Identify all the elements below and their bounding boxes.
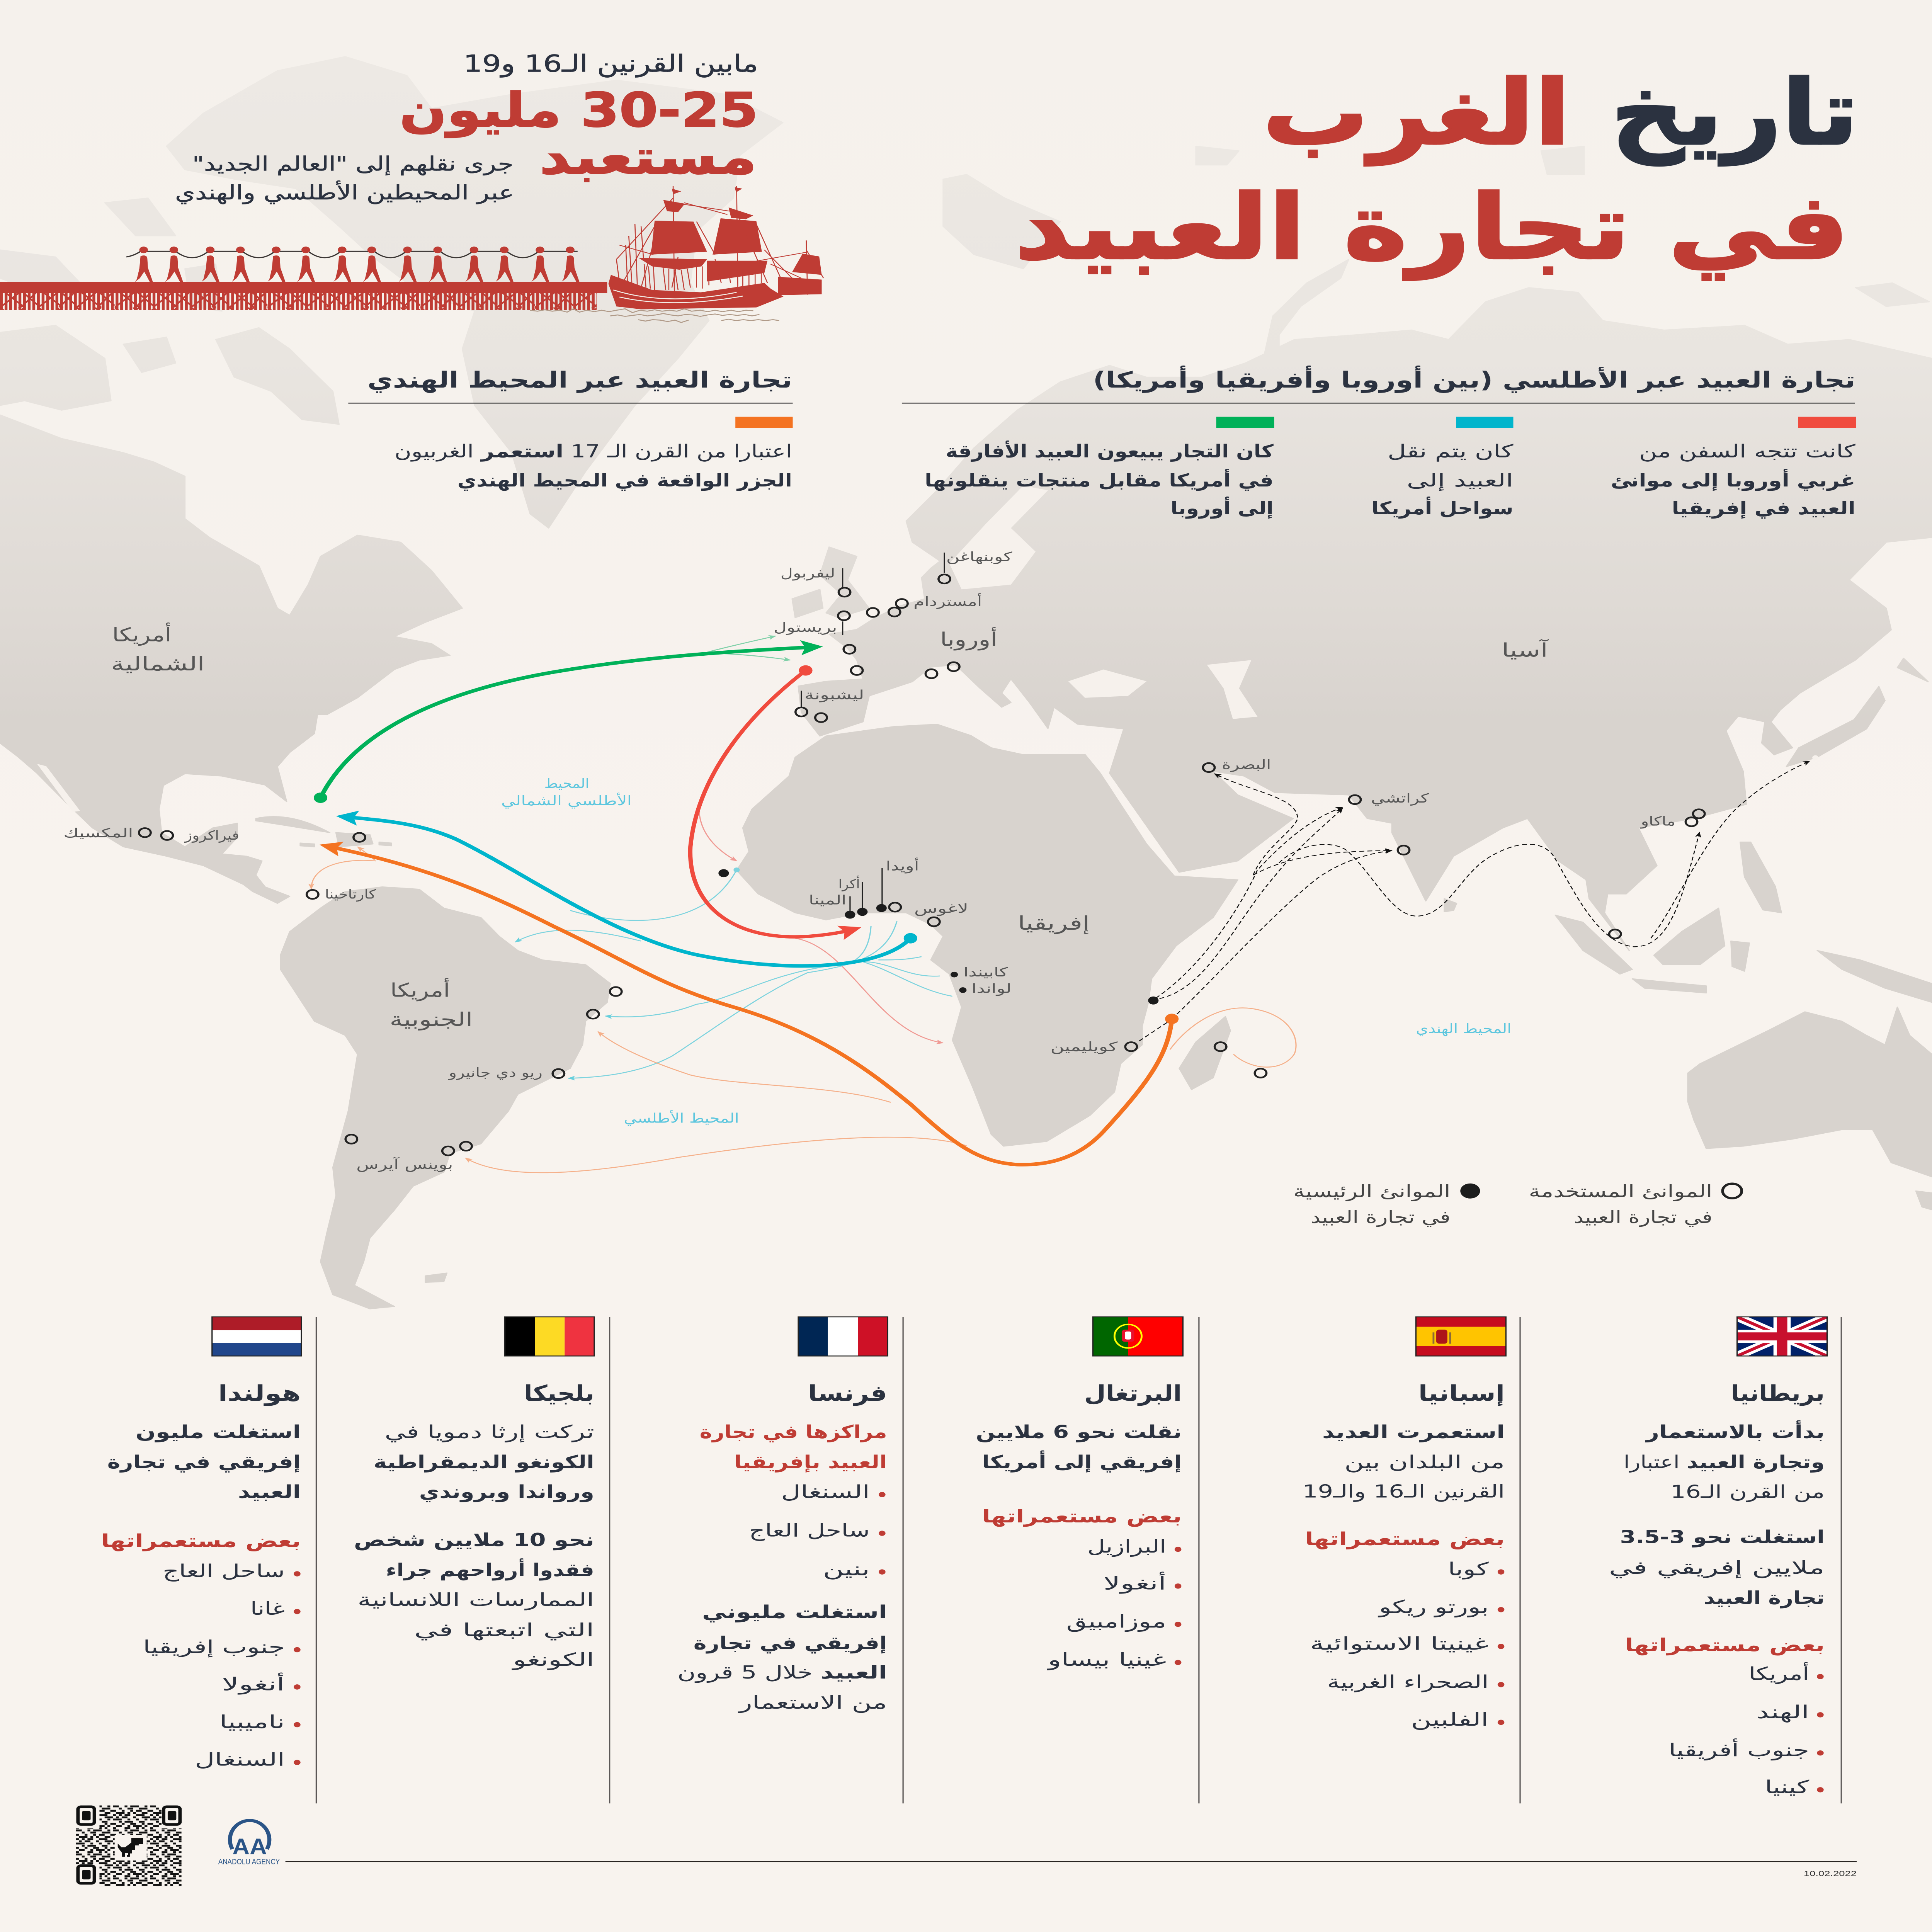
statistic block: مابين القرنين الـ16 و19 <box>464 50 758 78</box>
sea waves <box>530 309 779 323</box>
panel: Netherlands <box>101 1317 301 1770</box>
atlantic column: blue route: العبيد إلى <box>1406 470 1513 491</box>
panel: Britain: بعض مستعمراتها <box>1625 1634 1825 1656</box>
panel: Netherlands: هولندا <box>218 1381 301 1406</box>
map labels: oceans <box>501 776 1512 1126</box>
panel: France <box>677 1317 888 1713</box>
bullet list: السنغال <box>781 1481 870 1502</box>
map labels: cities: ماكاو <box>1640 814 1675 829</box>
bullet list: غينيا بيساو <box>1046 1649 1166 1670</box>
logo: Anadolu Agency: AA <box>232 1834 267 1859</box>
atlantic column: blue route <box>1372 417 1514 519</box>
map labels: cities: لاغوس <box>914 901 968 916</box>
map labels: continents: الجنوبية <box>389 1009 473 1031</box>
logo: Anadolu Agency: ANADOLU AGENCY <box>218 1857 280 1866</box>
map: Caribbean islands <box>256 816 391 847</box>
bullet list: أنغولا <box>222 1672 285 1695</box>
legend key: orange <box>735 417 793 428</box>
panel: France: العبيد خلال 5 قرون <box>677 1662 887 1683</box>
panel: Netherlands: العبيد <box>238 1481 301 1502</box>
panel: France: استغلت مليوني <box>702 1602 887 1622</box>
bullet list: الهند <box>1756 1701 1809 1723</box>
bullet list: بنين <box>823 1559 870 1580</box>
panel: Britain: ملايين إفريقي في <box>1609 1557 1825 1578</box>
logo: Anadolu Agency <box>218 1820 280 1866</box>
map labels: oceans: المحيط <box>544 776 589 791</box>
section: Indian Ocean slave trade: اعتبارا من القرن الـ 17 استعمر الغربيون <box>395 441 792 462</box>
leader lines <box>801 553 944 912</box>
map: South America <box>281 887 610 1309</box>
statistic block: جرى نقلهم إلى "العالم الجديد" <box>192 153 514 176</box>
map labels: cities: البصرة <box>1222 757 1271 772</box>
map labels: oceans: الأطلسي الشمالي <box>501 793 632 809</box>
flag: Netherlands <box>212 1317 301 1356</box>
bullet list: ناميبيا <box>219 1711 285 1732</box>
map: British Isles <box>792 547 869 617</box>
panel: Portugal: البرتغال <box>1084 1381 1182 1406</box>
section: Atlantic slave trade: تجارة العبيد عبر الأطلسي (بين أوروبا وأفريقيا وأمريكا) <box>1093 365 1855 393</box>
pier <box>0 282 607 310</box>
bullet list <box>1310 1559 1504 1730</box>
map labels: oceans: المحيط الهندي <box>1416 1021 1512 1036</box>
map labels: cities: كابيندا <box>963 965 1008 980</box>
bullet list: الفلبين <box>1411 1709 1489 1730</box>
panel: Belgium: الكونغو <box>511 1649 594 1670</box>
atlantic column: blue route: سواحل أمريكا <box>1372 497 1513 519</box>
atlantic column: green route: كان التجار يبيعون العبيد الأفارقة <box>946 440 1274 462</box>
map labels: oceans: المحيط الأطلسي <box>624 1110 739 1126</box>
statistic block: مستعبد <box>539 130 757 185</box>
panel: Spain: إسبانيا <box>1418 1381 1505 1406</box>
panel: Belgium: الممارسات اللانسانية <box>357 1589 594 1610</box>
bullet list <box>1668 1662 1824 1798</box>
panel: Britain: بدأت بالاستعمار <box>1645 1420 1825 1442</box>
legend: main ports: في تجارة العبيد <box>1311 1208 1451 1227</box>
panel: Spain: استعمرت العديد <box>1322 1422 1505 1442</box>
flag: Portugal <box>1093 1317 1183 1356</box>
panel: Britain: تجارة العبيد <box>1704 1587 1825 1608</box>
map: inland seas <box>37 486 1257 812</box>
bullet list: كوبا <box>1448 1559 1489 1580</box>
illustration: pier, chained captives and slave ship <box>0 186 823 323</box>
bullet list: أمريكا <box>1749 1662 1809 1684</box>
map labels: cities: فيراكروز <box>184 828 239 843</box>
route: orange Indian Ocean to Americas <box>325 846 1172 1165</box>
route origin dots <box>314 665 1818 1024</box>
panel: France: من الاستعمار <box>738 1692 887 1713</box>
panel: Portugal: نقلت نحو 6 ملايين <box>976 1422 1182 1442</box>
bullet list: جنوب أفريقيا <box>1668 1738 1809 1760</box>
route: red Europe to Africa <box>690 670 855 937</box>
map labels: cities <box>63 549 1675 1172</box>
map: Africa <box>736 724 1238 1146</box>
bullet list: غانا <box>250 1598 285 1619</box>
map legend <box>1293 1182 1742 1227</box>
panel: Portugal: إفريقي إلى أمريكا <box>982 1450 1182 1473</box>
panel: France: فرنسا <box>808 1381 887 1406</box>
map labels: continents: أمريكا <box>390 978 450 1002</box>
route: blue Africa to Americas <box>342 816 910 966</box>
map labels: continents <box>111 622 1549 1031</box>
flag: France <box>798 1317 888 1356</box>
panel: Britain: استغلت نحو 3-3.5 <box>1620 1527 1825 1548</box>
map labels: cities: كوبنهاغن <box>946 549 1012 565</box>
dashed Indian Ocean routes <box>1139 761 1810 1041</box>
panel: France: إفريقي في تجارة <box>694 1633 887 1653</box>
bullet list: جنوب إفريقيا <box>143 1636 285 1657</box>
panel: Netherlands: استغلت مليون <box>136 1422 301 1442</box>
atlantic column: red route: غربي أوروبا إلى موانئ <box>1611 469 1855 491</box>
panel: Belgium: ورواندا وبروندي <box>419 1481 594 1502</box>
map labels: cities: ريو دي جانيرو <box>448 1065 543 1080</box>
ports <box>139 553 1818 1155</box>
section: Indian Ocean slave trade: تجارة العبيد عبر المحيط الهندي <box>367 367 792 393</box>
map: Arctic islands <box>0 146 1929 424</box>
title line two: في تجارة العبيد <box>1015 175 1849 281</box>
QR code <box>76 1805 182 1886</box>
statistic block: 30-25 مليون <box>400 83 758 138</box>
map: North America <box>0 415 462 903</box>
panel: Spain <box>1303 1317 1506 1730</box>
map: Eurasia <box>798 287 1932 951</box>
map labels: cities: كويليمين <box>1050 1039 1118 1054</box>
map labels: cities: أكرا <box>838 876 860 891</box>
atlantic column: green route: في أمريكا مقابل منتجات ينقلونها <box>925 469 1274 491</box>
panel: Portugal <box>976 1317 1183 1670</box>
panel: Belgium <box>354 1317 594 1670</box>
map labels: cities: المكسيك <box>63 826 133 841</box>
world map background <box>0 56 1932 1309</box>
section: Atlantic slave trade <box>902 365 1856 519</box>
title word: red: الغرب <box>1262 61 1571 166</box>
map: Southeast Asia islands <box>1444 842 1781 993</box>
atlantic column: blue route: كان يتم نقل <box>1388 441 1514 462</box>
bullet list: الصحراء الغربية <box>1327 1671 1489 1692</box>
map: Australia <box>1688 1007 1932 1210</box>
map labels: cities: كراتشي <box>1371 791 1429 806</box>
map labels: cities: بوينس آيرس <box>356 1156 453 1172</box>
bullet list: ساحل العاج <box>163 1561 285 1582</box>
legend: main ports: الموانئ الرئيسية <box>1293 1182 1451 1201</box>
statistic block <box>175 50 758 204</box>
bullet list: البرازيل <box>1087 1536 1166 1557</box>
panel: Belgium: التي اتبعتها في <box>414 1619 594 1640</box>
flag: Spain <box>1416 1317 1506 1356</box>
panel: Belgium: الكونغو الديمقراطية <box>374 1452 594 1473</box>
used ports: open circles <box>139 575 1705 1155</box>
footer rule <box>286 1861 1857 1862</box>
map: Japan <box>1786 658 1928 767</box>
date: 10.02.2022 <box>1804 1870 1857 1878</box>
panel: Portugal: بعض مستعمراتها <box>982 1506 1182 1527</box>
map labels: continents: أوروبا <box>940 627 997 651</box>
map labels: cities: المينا <box>809 893 846 908</box>
bullet list: موزامبيق <box>1066 1611 1166 1632</box>
map labels: cities: أمستردام <box>913 593 982 609</box>
map labels: cities: ليفربول <box>781 566 835 581</box>
panel: Netherlands: إفريقي في تجارة <box>107 1452 301 1473</box>
map labels: cities: أويدا <box>886 858 919 874</box>
title <box>1015 61 1859 281</box>
legend: used ports <box>1529 1182 1742 1227</box>
route: green Americas to Europe <box>321 647 817 798</box>
map labels: continents: إفريقيا <box>1018 913 1090 935</box>
flag: Belgium <box>505 1317 594 1356</box>
bullet list: ساحل العاج <box>749 1520 870 1541</box>
section: Indian Ocean slave trade <box>348 367 793 491</box>
statistic block: عبر المحيطين الأطلسي والهندي <box>175 180 514 204</box>
map: Greenland <box>167 56 783 528</box>
flag: UK <box>1737 1317 1827 1356</box>
map labels: continents: الشمالية <box>111 653 205 675</box>
legend: used ports: في تجارة العبيد <box>1574 1208 1713 1227</box>
map labels: cities: كارتاخينا <box>325 887 376 902</box>
map: Madagascar <box>1179 1017 1230 1090</box>
panel: Spain: من البلدان بين <box>1344 1452 1505 1473</box>
map labels: cities: لواندا <box>971 981 1012 996</box>
panel: Britain: وتجارة العبيد اعتبارا <box>1624 1452 1825 1473</box>
bullet list: غينيتا الاستوائية <box>1310 1633 1489 1654</box>
panel: Belgium: بلجيكا <box>524 1381 594 1406</box>
bullet list: السنغال <box>195 1749 285 1770</box>
column dividers <box>316 1317 1841 1803</box>
icon: dinosaur <box>118 1838 143 1857</box>
slave ship <box>609 186 823 309</box>
map labels: cities: ليشبونة <box>804 687 864 702</box>
main ports: filled circles <box>718 869 1158 1005</box>
atlantic column: red route: كانت تتجه السفن من <box>1639 441 1855 462</box>
panel: Britain <box>1609 1317 1827 1798</box>
legend: used ports: الموانئ المستخدمة <box>1529 1182 1713 1201</box>
panel: Spain: القرنين الـ16 والـ19 <box>1303 1481 1505 1502</box>
atlantic column: green route <box>925 417 1274 519</box>
panel: France: مراكزها في تجارة <box>700 1422 887 1442</box>
bullet list: كينيا <box>1765 1776 1810 1798</box>
bullet list: بورتو ريكو <box>1378 1596 1489 1617</box>
bullet list <box>749 1481 886 1580</box>
bullet list <box>143 1561 301 1770</box>
panel: Britain: من القرن الـ16 <box>1670 1481 1825 1502</box>
title word: dark: تاريخ <box>1611 61 1859 166</box>
panel: Belgium: فقدوا أرواحهم جراء <box>386 1558 594 1580</box>
panel: Britain: بريطانيا <box>1731 1381 1825 1406</box>
legend: main ports <box>1293 1182 1480 1227</box>
map labels: continents: أمريكا <box>112 622 171 646</box>
panel: France: العبيد بإفريقيا <box>734 1452 887 1473</box>
panel: Belgium: تركت إرثا دمويا في <box>384 1422 594 1442</box>
pale secondary routes <box>311 636 1296 1173</box>
map labels: cities: بريستول <box>774 620 837 635</box>
panel: Spain: بعض مستعمراتها <box>1305 1529 1505 1550</box>
atlantic column: red route: العبيد في إفريقيا <box>1672 498 1855 519</box>
map labels: continents: آسيا <box>1502 639 1549 662</box>
atlantic column: red route <box>1611 417 1856 519</box>
bullet list: أنغولا <box>1104 1571 1166 1594</box>
atlantic column: green route: إلى أوروبا <box>1170 497 1274 519</box>
panel: Netherlands: بعض مستعمراتها <box>101 1531 301 1551</box>
map: New Guinea <box>1817 951 1932 1002</box>
panel: Belgium: نحو 10 ملايين شخص <box>354 1529 594 1551</box>
section: Indian Ocean slave trade: الجزر الواقعة في المحيط الهندي <box>457 470 792 491</box>
routes <box>311 636 1810 1173</box>
bullet list <box>1046 1536 1181 1670</box>
chained captives <box>126 247 580 282</box>
